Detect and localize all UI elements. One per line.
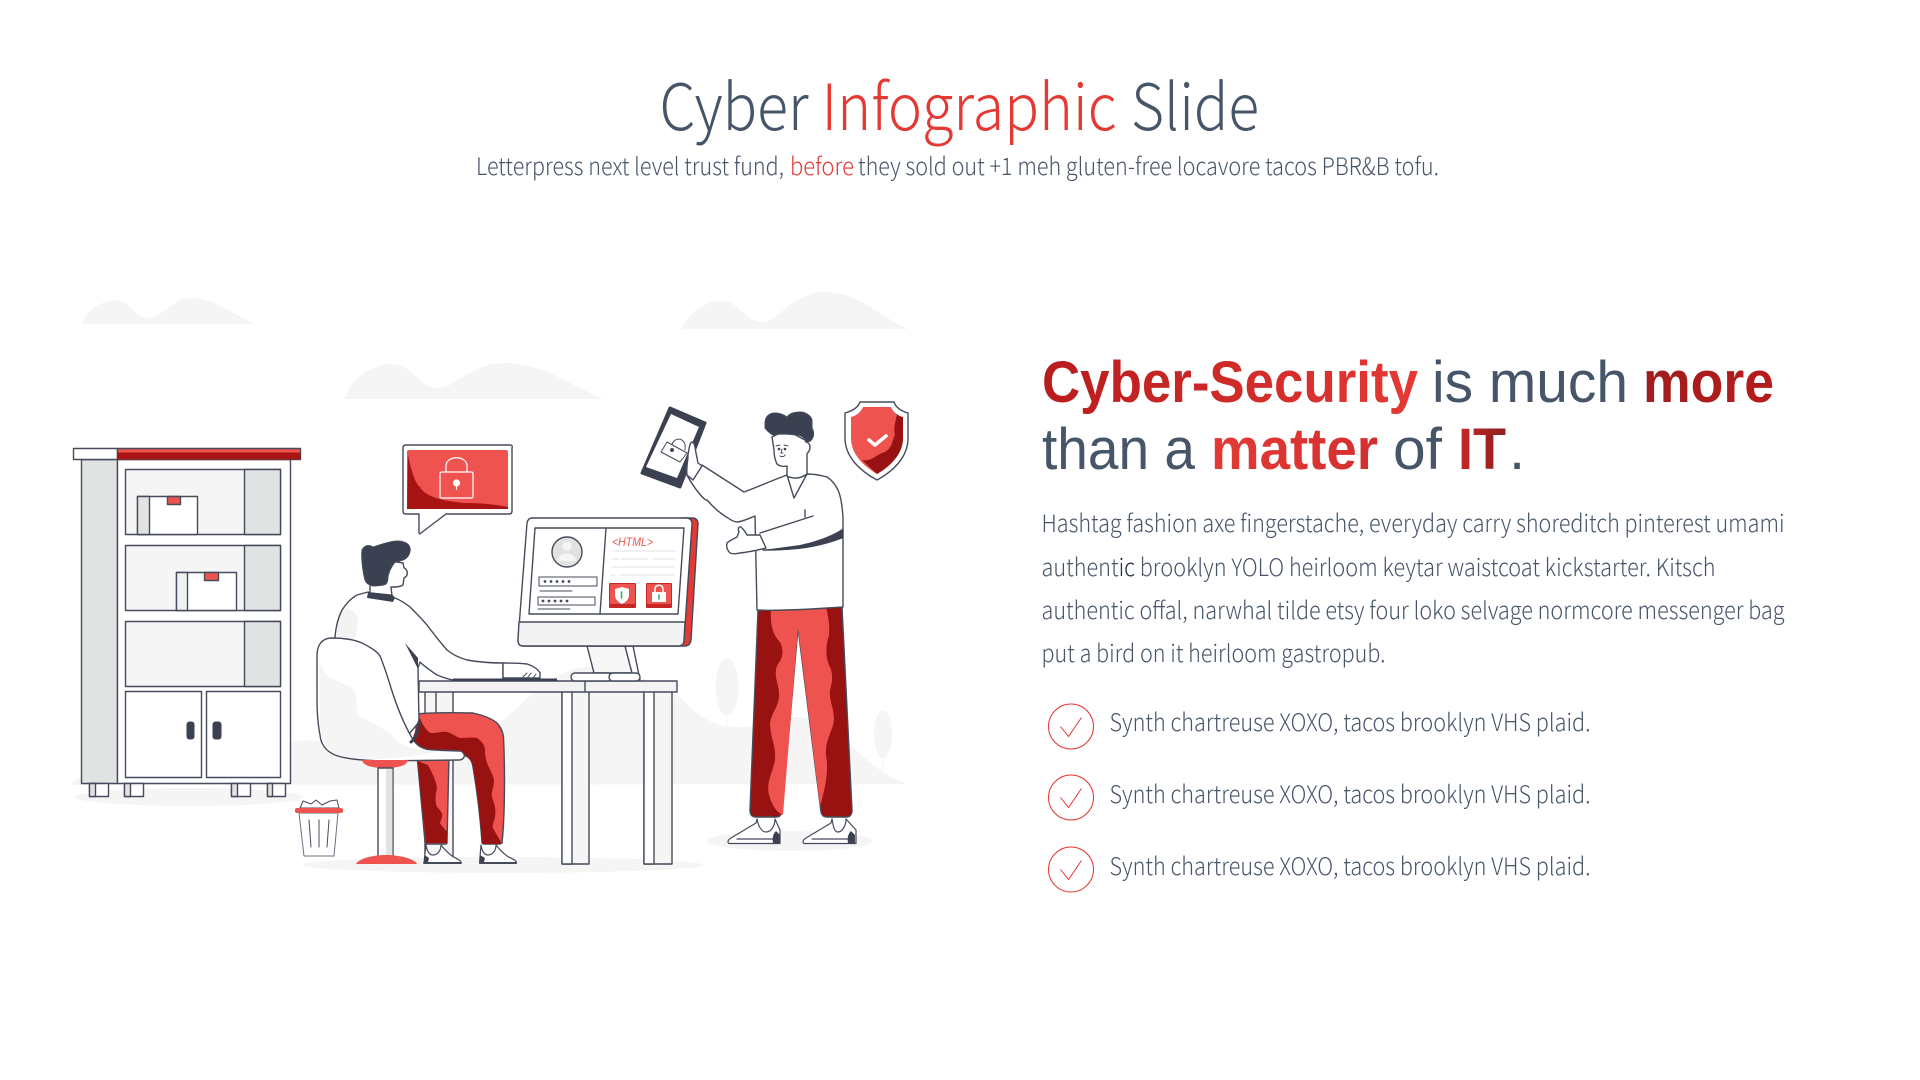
check item 2: Synth chartreuse XOXO, tacos brooklyn VHS plaid. [1110,775,1590,810]
body paragraph: authentic brooklyn YOLO heirloom keytar waistcoat kickstarter. Kitsch [1042,548,1716,583]
monitor [518,518,698,681]
monitor body [518,518,692,646]
shield badge [845,402,908,480]
far leg [417,755,449,844]
neck and face [370,560,407,596]
hand and cuff [453,663,557,681]
heading: than a [1042,417,1196,482]
seated person [317,541,557,864]
check item 3 [1048,847,1590,892]
code lines [611,551,676,575]
body paragraph: put a bird on it heirloom gastropub. [1042,634,1386,669]
trousers [750,607,852,817]
check item 1: Synth chartreuse XOXO, tacos brooklyn VHS plaid. [1110,703,1590,738]
cabinet feet [90,784,286,796]
background hills [70,667,908,785]
shoes [424,845,516,863]
cabinet [74,448,300,796]
cabinet doors [126,692,280,778]
heading: is much [1432,350,1628,415]
heading [1042,350,1774,482]
cabinet side [82,460,118,784]
subtitle [476,147,1439,182]
heading: IT [1458,417,1506,482]
body paragraph [1042,504,1784,669]
front arm [760,510,844,550]
holding hand [687,442,702,480]
checklist [1048,703,1590,892]
login fields [538,577,597,609]
shelf 2 with box [126,546,280,610]
shelf 1 with box [126,470,280,534]
standing person [642,408,856,844]
hand [727,527,766,554]
trash can [295,800,343,856]
background clouds [82,292,908,399]
monitor chin [518,622,685,646]
screen [529,528,684,614]
desk leg centre [562,691,589,864]
cabinet top [74,448,300,460]
speech bubble with lock [403,445,512,534]
heading: of [1393,417,1443,482]
illustration: cyber security office [70,292,908,873]
cabinet body [118,460,290,784]
shelf 3 [126,622,280,686]
desk top [419,681,677,692]
chair seat post [356,760,417,864]
floor shadows [75,788,873,873]
hair [362,541,410,586]
monitor stand [571,646,640,681]
desk [419,681,677,864]
heading: Cyber-Security [1042,350,1418,415]
arm shadow [405,643,418,669]
v neck [787,474,807,498]
sweater [335,592,503,745]
tablet lock [661,439,687,462]
check item 1 [1048,703,1590,749]
tablet [642,408,705,487]
desk leg right [644,691,672,864]
lock icon [440,458,473,498]
shoes [728,819,856,844]
title [660,57,1259,149]
heading: matter [1211,417,1378,482]
subtitle: before [790,147,854,182]
heading: . [1509,417,1525,482]
shield button [609,583,636,608]
background trees [716,658,892,770]
subtitle: they sold out +1 meh gluten-free locavore tacos PBR&B tofu. [858,147,1439,182]
heading: more [1643,350,1774,415]
desk left leg [425,691,453,857]
body paragraph: Hashtag fashion axe fingerstache, everyday carry shoreditch pinterest umami [1042,504,1784,539]
avatar [552,537,582,567]
lock button [646,583,672,608]
hair [765,412,814,442]
check item 3: Synth chartreuse XOXO, tacos brooklyn VHS plaid. [1110,847,1590,882]
sweater [687,465,843,610]
check item 2 [1048,775,1590,820]
chair [317,638,464,761]
body paragraph: authentic offal, narwhal tilde etsy four loko selvage normcore messenger bag [1042,591,1784,626]
title: Cyber [660,57,809,149]
neck and head [772,430,810,478]
title: Infographic [822,57,1116,149]
title: Slide [1131,57,1259,149]
monitor side [675,518,698,646]
near leg [412,713,504,844]
sweater shading [336,607,358,642]
subtitle: Letterpress next level trust fund, [476,147,784,182]
face details [776,445,788,457]
html label: <HTML> [612,535,653,549]
collar [367,592,395,602]
